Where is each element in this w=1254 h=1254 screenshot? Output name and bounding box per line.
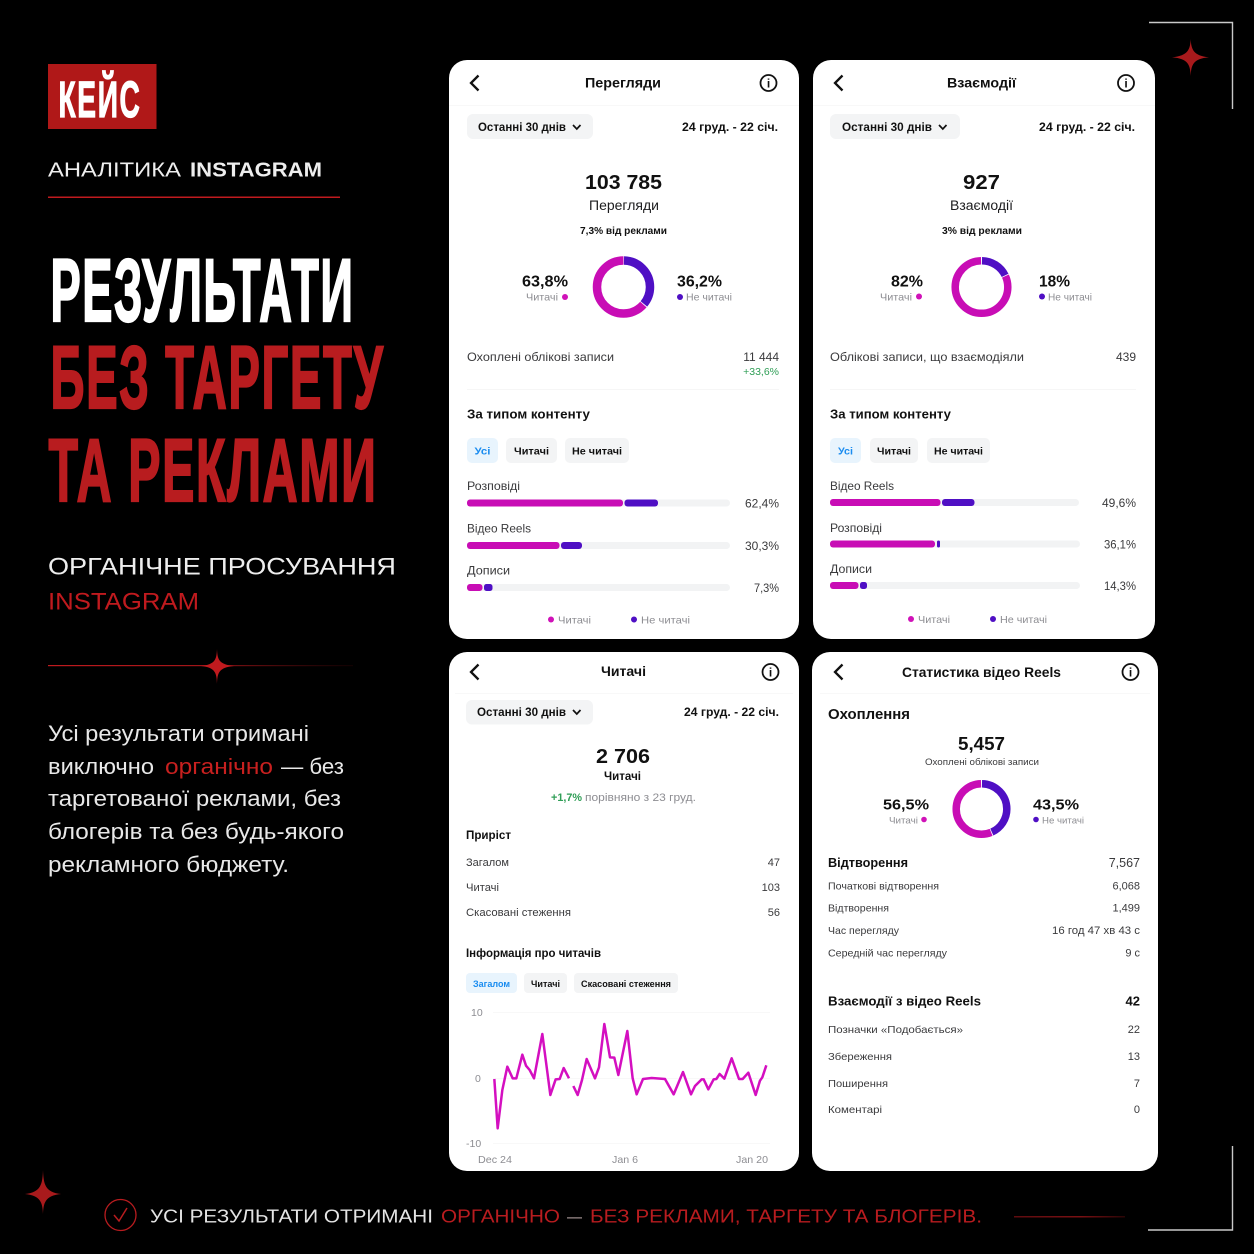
donut legend bbox=[883, 796, 1084, 826]
bar legend: Не читачі bbox=[1000, 614, 1047, 626]
bar chart: content types: 62,4% bbox=[745, 496, 779, 510]
period selector: 24 груд. - 22 січ. bbox=[682, 122, 778, 134]
subheading: organic promotion bbox=[48, 554, 396, 616]
table: plays: Середній час перегляду bbox=[828, 948, 948, 960]
table: interactions: 22 bbox=[1128, 1024, 1140, 1036]
table: interactions: 13 bbox=[1128, 1051, 1140, 1063]
header: Читачі: Читачі bbox=[601, 664, 646, 679]
bar chart: content types: 14,3% bbox=[1104, 579, 1136, 593]
body paragraph bbox=[48, 721, 344, 877]
period selector: Останні 30 днів bbox=[478, 122, 566, 134]
row: accounts engaged: Облікові записи, що взаємодіяли bbox=[830, 350, 1024, 364]
filter pills: Усі bbox=[474, 446, 491, 458]
period selector bbox=[467, 114, 778, 139]
line chart: follower growth: Dec 24 bbox=[478, 1154, 512, 1166]
subheading: organic promotion: ОРГАНІЧНЕ ПРОСУВАННЯ bbox=[48, 554, 396, 580]
period selector: 24 груд. - 22 січ. bbox=[1039, 122, 1135, 134]
bar legend: Читачі bbox=[918, 614, 950, 626]
donut chart: 82 / 18 bbox=[955, 261, 1008, 313]
body paragraph: рекламного бюджету. bbox=[48, 852, 289, 877]
donut chart: 56,5 / 43,5 bbox=[956, 784, 1007, 834]
growth table: Скасовані стеження bbox=[466, 907, 571, 919]
bar chart: content types bbox=[467, 479, 779, 595]
donut legend: 56,5% bbox=[883, 796, 929, 814]
bar chart: content types: 36,1% bbox=[1104, 538, 1136, 552]
metric: 103 785: 7,3% від реклами bbox=[580, 225, 667, 237]
table: interactions: 7 bbox=[1134, 1078, 1140, 1090]
donut chart: 63,8 / 36,2 bbox=[597, 260, 650, 314]
header: Читачі: i bbox=[769, 666, 772, 680]
subtitle: Аналітика Instagram: АНАЛІТИКА bbox=[48, 160, 182, 182]
growth table: 47 bbox=[768, 857, 780, 869]
filter pills: Не читачі bbox=[572, 446, 622, 458]
line chart: follower growth: Jan 6 bbox=[612, 1154, 638, 1166]
panel: Статистика відео Reels bbox=[812, 652, 1158, 1171]
header: Взаємодії: i bbox=[1124, 76, 1128, 90]
table: plays: 9 с bbox=[1125, 948, 1140, 960]
donut legend: 18% bbox=[1039, 274, 1070, 290]
header: Статистика відео Reels bbox=[820, 664, 1150, 694]
bottom statement bbox=[150, 1206, 982, 1226]
metric: 5,457 bbox=[925, 734, 1039, 768]
period selector: Останні 30 днів bbox=[477, 707, 566, 719]
table: interactions: Збереження bbox=[828, 1051, 892, 1063]
bar chart: content types: Відео Reels bbox=[830, 479, 894, 493]
bar legend: Не читачі bbox=[641, 614, 690, 626]
growth table: Читачі bbox=[466, 882, 499, 894]
line chart: follower growth: -10 bbox=[466, 1138, 481, 1150]
metric: 2 706 bbox=[551, 746, 696, 804]
donut legend: Не читачі bbox=[1042, 816, 1084, 826]
line chart: follower growth: 10 bbox=[471, 1007, 483, 1019]
main heading: ТА РЕКЛАМИ bbox=[48, 420, 378, 520]
bottom statement: ОРГАНІЧНО bbox=[441, 1206, 560, 1226]
filter pills: Загалом bbox=[473, 979, 510, 990]
table: interactions bbox=[828, 994, 1140, 1116]
period selector bbox=[830, 114, 1135, 139]
icon: sparkle bottom left bbox=[25, 1170, 61, 1214]
growth table: Приріст bbox=[466, 830, 511, 842]
donut legend: 63,8% bbox=[522, 274, 568, 290]
donut legend bbox=[522, 274, 732, 304]
bar chart: content types: Розповіді bbox=[467, 479, 520, 493]
bar chart: content types: 7,3% bbox=[754, 581, 779, 595]
table: interactions: Взаємодії з відео Reels bbox=[828, 994, 981, 1008]
bottom accent line bbox=[1014, 1216, 1125, 1218]
badge: КЕЙС bbox=[48, 64, 156, 129]
table: interactions: Поширення bbox=[828, 1078, 888, 1090]
metric: 927: Взаємодії bbox=[950, 198, 1013, 213]
metric: 5,457: Охоплені облікові записи bbox=[925, 757, 1039, 768]
body paragraph: таргетованої реклами, без bbox=[48, 786, 341, 811]
panel: Читачі bbox=[449, 652, 799, 1171]
table: plays bbox=[828, 856, 1141, 960]
metric: 103 785 bbox=[580, 172, 667, 237]
row: accounts reached: +33,6% bbox=[743, 366, 779, 378]
filter pills: Скасовані стеження bbox=[581, 979, 671, 990]
header: Перегляди: i bbox=[767, 76, 770, 90]
donut legend bbox=[880, 274, 1092, 304]
filter pills bbox=[830, 438, 990, 463]
icon: check mark bbox=[105, 1200, 136, 1230]
bottom statement: — bbox=[567, 1206, 582, 1226]
metric: 2 706: Читачі bbox=[604, 771, 641, 783]
body paragraph: виключно bbox=[48, 754, 154, 779]
metric: 5,457: 5,457 bbox=[958, 734, 1005, 754]
table: plays: Час перегляду bbox=[828, 925, 900, 937]
metric: 927 bbox=[942, 172, 1022, 237]
table: interactions: 0 bbox=[1134, 1104, 1140, 1116]
line chart: follower growth: 0 bbox=[475, 1073, 481, 1085]
filter pills: Не читачі bbox=[934, 446, 983, 458]
heading: follower info: Інформація про читачів bbox=[466, 948, 601, 960]
corner frame: top right bbox=[1149, 22, 1232, 109]
header: Перегляди: Перегляди bbox=[585, 76, 661, 90]
heading: by content type: За типом контенту bbox=[467, 406, 591, 422]
donut legend: Не читачі bbox=[686, 292, 732, 304]
growth table bbox=[466, 830, 780, 919]
bar chart: content types: Розповіді bbox=[830, 521, 882, 535]
donut legend: 82% bbox=[891, 274, 923, 290]
bar chart: content types: 49,6% bbox=[1102, 496, 1136, 510]
table: plays: 16 год 47 хв 43 с bbox=[1052, 925, 1141, 937]
subtitle: Аналітика Instagram bbox=[48, 160, 340, 198]
icon: sparkle top right bbox=[1172, 39, 1209, 76]
heading: Охоплення: Охоплення bbox=[828, 707, 910, 723]
table: plays: 1,499 bbox=[1112, 902, 1140, 914]
header: Статистика відео Reels: Статистика відео Reels bbox=[902, 665, 1061, 680]
period selector: Останні 30 днів bbox=[842, 122, 932, 134]
line chart: follower growth: Jan 20 bbox=[736, 1154, 768, 1166]
donut legend: 36,2% bbox=[677, 274, 722, 290]
table: plays: 6,068 bbox=[1112, 880, 1140, 892]
header: Взаємодії: Взаємодії bbox=[947, 76, 1017, 90]
body paragraph: Усі результати отримані bbox=[48, 721, 309, 746]
bar chart: content types: Дописи bbox=[467, 564, 510, 578]
row: accounts engaged bbox=[830, 350, 1136, 390]
body paragraph: — без bbox=[281, 754, 344, 779]
row: accounts reached bbox=[467, 350, 779, 390]
filter pills: Усі bbox=[838, 446, 853, 458]
metric: 2 706: 2 706 bbox=[596, 746, 650, 768]
growth table: Загалом bbox=[466, 857, 509, 869]
metric: 2 706: +1,7% bbox=[551, 792, 582, 804]
body paragraph: блогерів та без будь-якого bbox=[48, 819, 344, 844]
table: interactions: 42 bbox=[1126, 994, 1140, 1008]
donut legend: Читачі bbox=[889, 816, 918, 826]
panel: Перегляди bbox=[449, 60, 799, 639]
main heading: БЕЗ ТАРГЕТУ bbox=[50, 327, 384, 427]
table: interactions: Коментарі bbox=[828, 1104, 882, 1116]
metric: 927: 3% від реклами bbox=[942, 225, 1022, 237]
line chart: follower growth bbox=[466, 1007, 770, 1166]
corner frame: bottom right bbox=[1148, 1146, 1232, 1230]
table: plays: Відтворення bbox=[828, 856, 908, 870]
bar legend: Читачі bbox=[558, 614, 591, 626]
metric: 927: 927 bbox=[963, 172, 1000, 194]
bottom statement: БЕЗ РЕКЛАМИ, ТАРГЕТУ ТА БЛОГЕРІВ. bbox=[590, 1206, 982, 1226]
panel: Взаємодії bbox=[813, 60, 1155, 639]
filter pills: Читачі bbox=[877, 446, 911, 458]
period selector bbox=[466, 700, 779, 724]
metric: 103 785: Перегляди bbox=[589, 198, 659, 213]
heading: by content type: За типом контенту bbox=[830, 406, 952, 422]
table: plays: Відтворення bbox=[828, 902, 889, 914]
header: Читачі bbox=[455, 664, 793, 694]
donut legend: Читачі bbox=[880, 292, 912, 304]
period selector: 24 груд. - 22 січ. bbox=[684, 707, 779, 719]
header: Статистика відео Reels: i bbox=[1129, 666, 1132, 680]
metric: 103 785: 103 785 bbox=[585, 172, 662, 194]
bar chart: content types: Дописи bbox=[830, 562, 872, 576]
filter pills bbox=[466, 973, 678, 993]
bar chart: content types bbox=[830, 479, 1136, 593]
header: Перегляди bbox=[449, 75, 799, 106]
growth table: 103 bbox=[762, 882, 780, 894]
bar chart: content types: 30,3% bbox=[745, 539, 779, 553]
donut legend: Читачі bbox=[526, 292, 558, 304]
bar legend bbox=[908, 614, 1047, 626]
row: accounts reached: 11 444 bbox=[743, 350, 779, 364]
growth table: 56 bbox=[768, 907, 780, 919]
metric: 2 706: порівняно з 23 груд. bbox=[585, 792, 696, 804]
table: interactions: Позначки «Подобається» bbox=[828, 1024, 963, 1036]
filter pills: Читачі bbox=[531, 979, 560, 990]
table: plays: 7,567 bbox=[1109, 856, 1140, 870]
bar legend bbox=[548, 614, 690, 626]
filter pills: Читачі bbox=[514, 446, 549, 458]
header: Взаємодії bbox=[813, 75, 1155, 106]
subheading: organic promotion: INSTAGRAM bbox=[48, 588, 199, 616]
main heading: РЕЗУЛЬТАТИ bbox=[50, 240, 354, 340]
main heading bbox=[48, 240, 384, 520]
sparkle divider bbox=[48, 649, 353, 684]
bottom statement: УСІ РЕЗУЛЬТАТИ ОТРИМАНІ bbox=[150, 1206, 433, 1226]
donut legend: Не читачі bbox=[1048, 292, 1092, 304]
filter pills bbox=[467, 438, 629, 463]
bar chart: content types: Відео Reels bbox=[467, 522, 531, 536]
subtitle: Аналітика Instagram: INSTAGRAM bbox=[190, 160, 322, 182]
donut legend: 43,5% bbox=[1033, 796, 1079, 814]
row: accounts reached: Охоплені облікові записи bbox=[467, 350, 614, 364]
table: plays: Початкові відтворення bbox=[828, 880, 939, 892]
badge: КЕЙС: КЕЙС bbox=[58, 70, 142, 128]
body paragraph: органічно bbox=[165, 754, 273, 779]
row: accounts engaged: 439 bbox=[1116, 350, 1136, 364]
